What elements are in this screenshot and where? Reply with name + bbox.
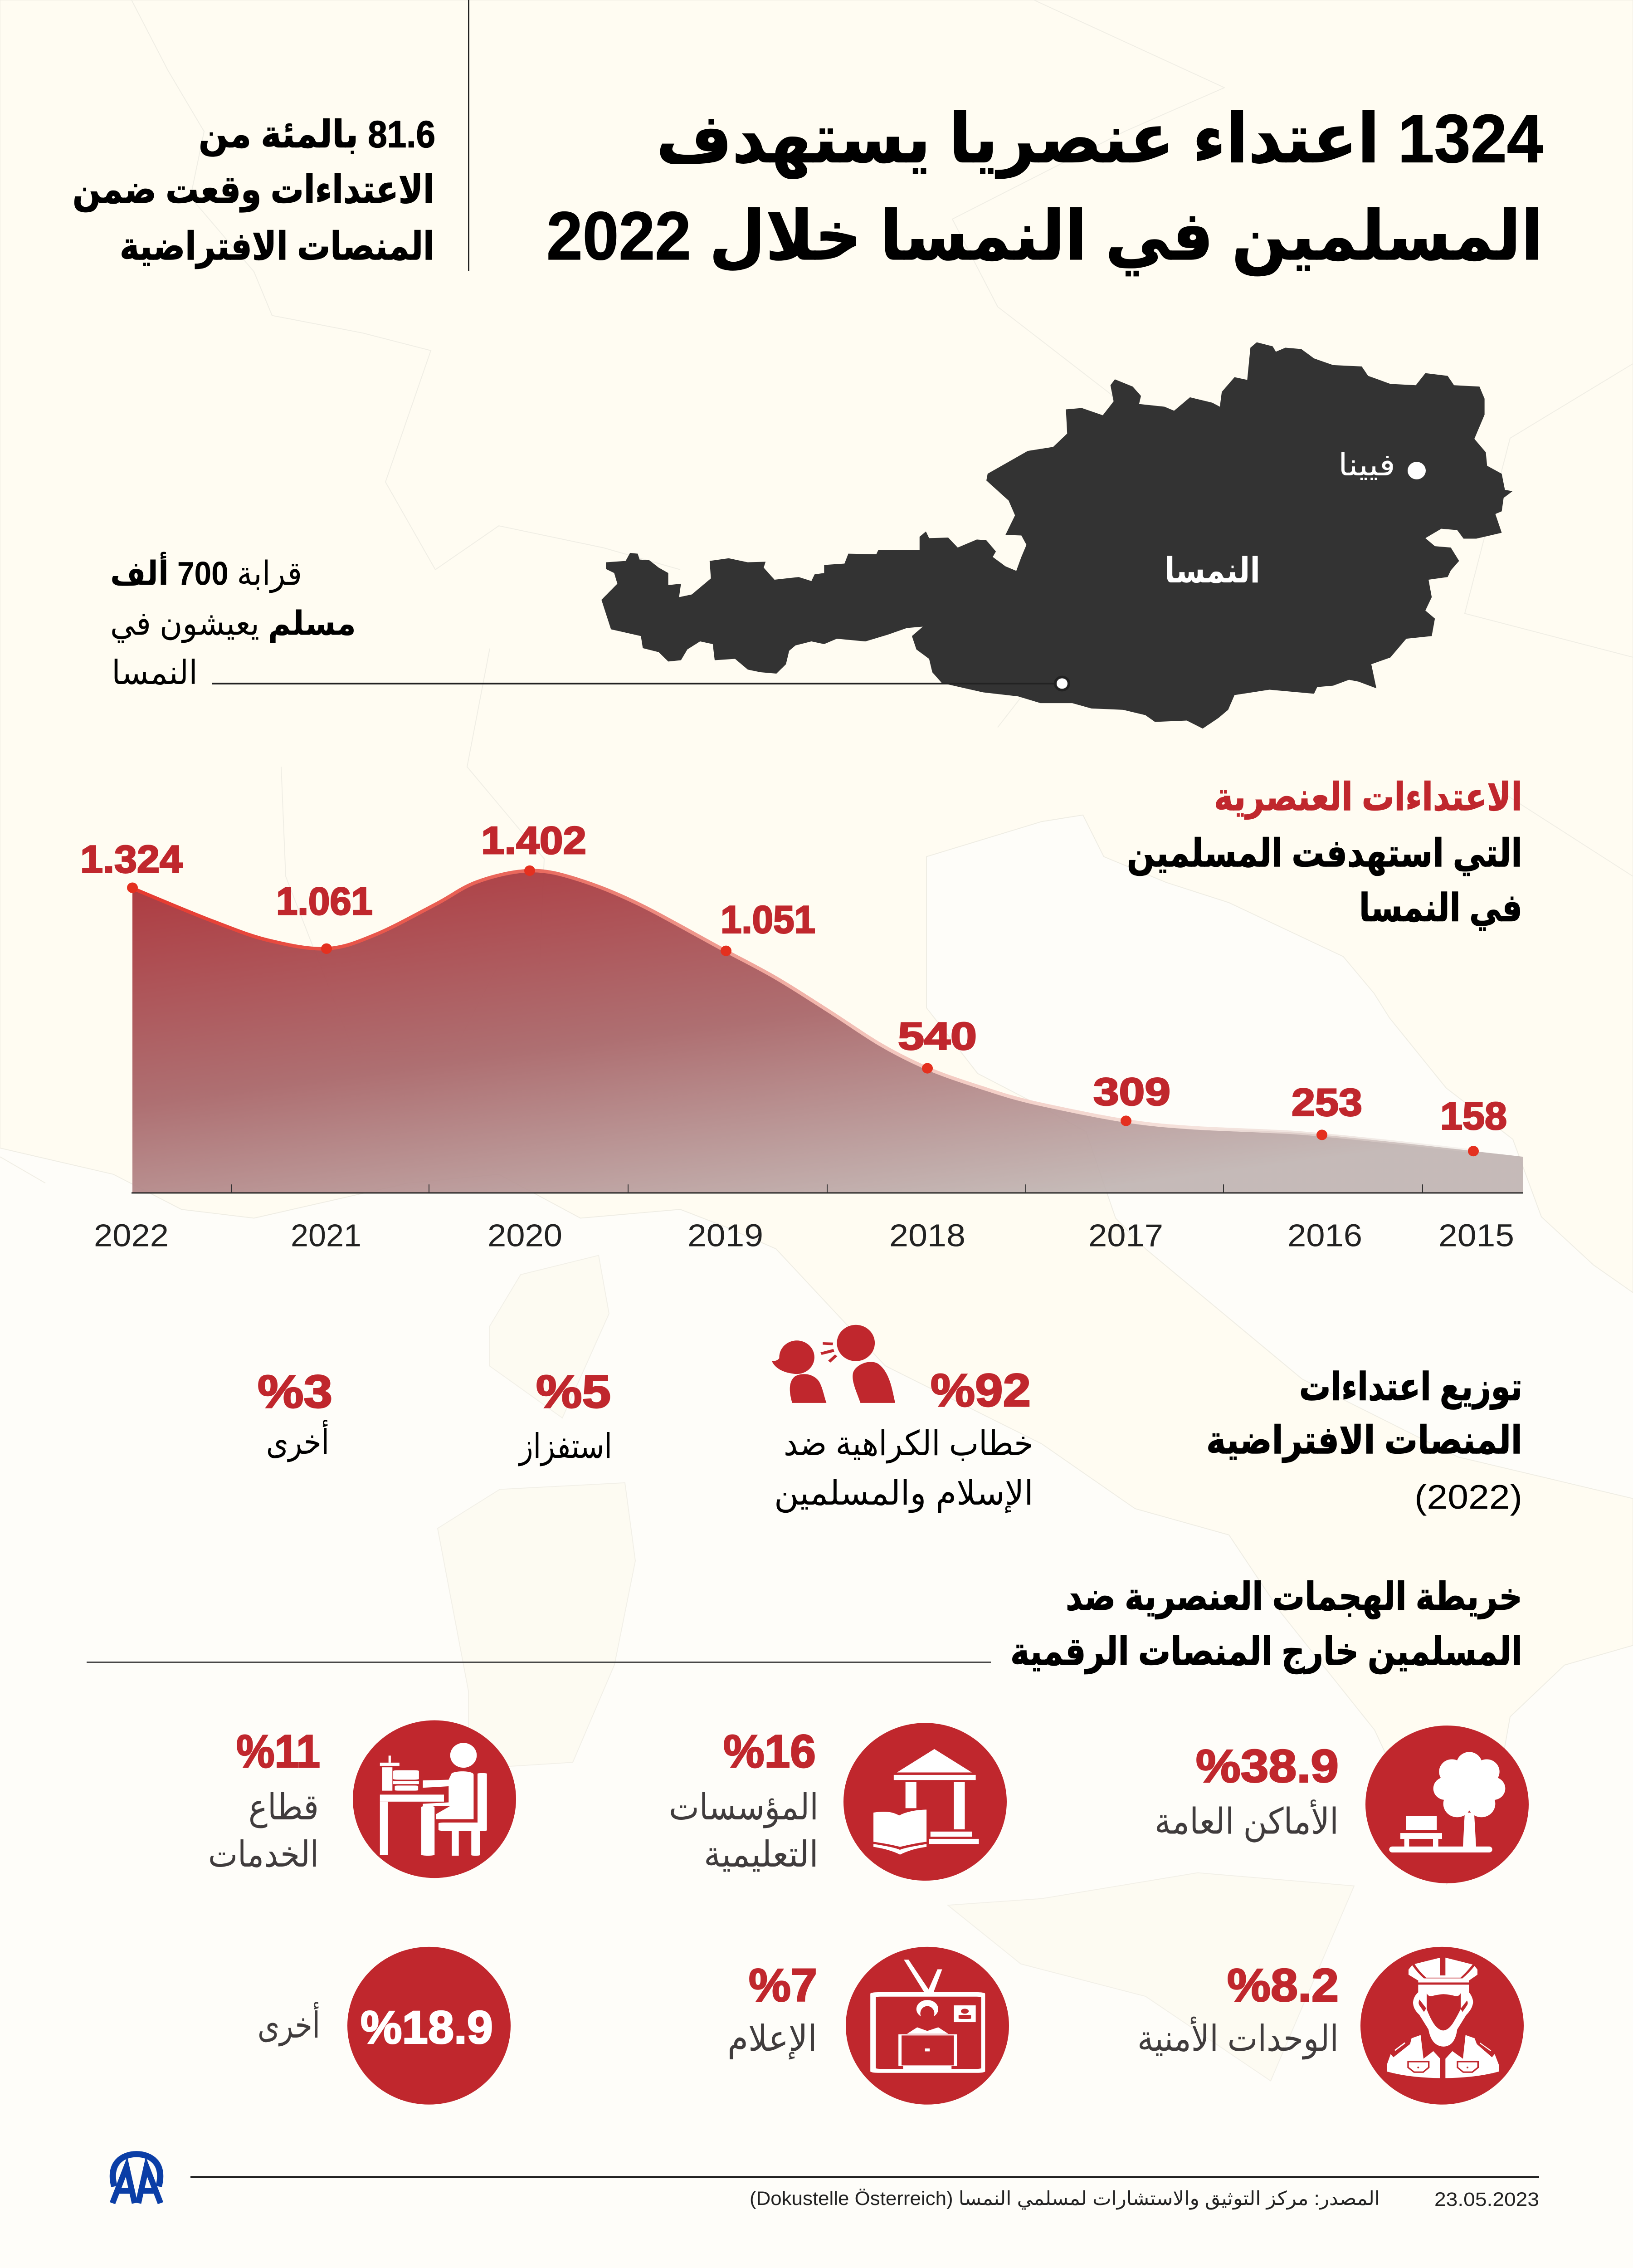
year axis labels: 2020 xyxy=(487,1217,562,1253)
stat: hate speech: الإسلام والمسلمين xyxy=(774,1474,1033,1513)
icon: person eating at table xyxy=(353,1721,516,1878)
stat: public places xyxy=(1155,1725,1529,1883)
title: 1324 اعتداء عنصريا يستهدف xyxy=(656,100,1543,179)
stat: educational institutions: %16 xyxy=(723,1725,816,1777)
callout: online share xyxy=(73,0,469,271)
icon: two people arguing xyxy=(772,1325,895,1403)
value labels: 1.324 xyxy=(80,838,182,881)
year axis labels xyxy=(94,1217,1514,1253)
map of Austria xyxy=(601,342,1512,728)
year axis labels: 2018 xyxy=(889,1217,965,1253)
year axis labels: 2019 xyxy=(687,1217,763,1253)
stat: public places: %38.9 xyxy=(1196,1740,1339,1792)
stat: provocation xyxy=(518,1366,612,1466)
footer: 23.05.2023 xyxy=(1434,2189,1539,2210)
area chart xyxy=(80,819,1523,1253)
heading: offline attacks xyxy=(87,1575,1522,1674)
callout: online share: المنصات الافتراضية xyxy=(120,225,434,269)
heading: racist attacks chart: التي استهدفت المسلمين xyxy=(1127,832,1522,875)
footer xyxy=(190,2176,1539,2210)
stat: other attacks: %18.9 xyxy=(361,2002,493,2053)
value labels: 540 xyxy=(898,1015,977,1058)
stat: other: أخرى xyxy=(266,1420,329,1462)
data points xyxy=(127,865,1479,1156)
callout: Muslim population: قرابة 700 ألف xyxy=(110,552,302,593)
callout: Muslim population: النمسا xyxy=(112,654,198,691)
heading: online platform distribution xyxy=(1206,1366,1522,1516)
stat: security units: الوحدات الأمنية xyxy=(1137,2016,1339,2060)
year axis labels: 2016 xyxy=(1287,1217,1362,1253)
label: Austria: النمسا xyxy=(1165,551,1260,590)
stat: security units: %8.2 xyxy=(1227,1960,1339,2011)
title xyxy=(546,100,1543,276)
stat: educational institutions: التعليمية xyxy=(704,1834,819,1875)
stat: services sector: الخدمات xyxy=(208,1834,319,1875)
label: Vienna: فيينا xyxy=(1338,448,1395,482)
value labels: 309 xyxy=(1093,1071,1170,1114)
stat: other xyxy=(258,1366,332,1462)
heading: racist attacks chart: الاعتداءات العنصرية xyxy=(1214,776,1522,820)
stat: other attacks xyxy=(258,1947,511,2105)
heading: racist attacks chart xyxy=(1127,776,1522,930)
heading: offline attacks: المسلمين خارج المنصات الرقمية xyxy=(1010,1630,1522,1674)
stat: educational institutions: المؤسسات xyxy=(669,1787,819,1828)
stat: educational institutions xyxy=(669,1723,1007,1881)
logo: Anadolu Agency xyxy=(112,2154,161,2203)
value labels: 1.402 xyxy=(481,819,586,862)
icon: television presenter xyxy=(846,1947,1009,2105)
value labels: 158 xyxy=(1440,1095,1507,1138)
icon: tree and bench xyxy=(1365,1725,1529,1883)
stat: provocation: %5 xyxy=(536,1366,611,1418)
year axis labels: 2017 xyxy=(1088,1217,1163,1253)
year axis labels: 2015 xyxy=(1438,1217,1514,1253)
title: المسلمين في النمسا خلال 2022 xyxy=(546,197,1543,276)
heading: online platform distribution: المنصات الافتراضية xyxy=(1206,1419,1522,1463)
stat: other attacks: أخرى xyxy=(258,2002,320,2047)
callout: online share: 81.6 بالمئة من xyxy=(199,113,435,156)
stat: hate speech xyxy=(772,1325,1033,1513)
stat: services sector: قطاع xyxy=(249,1787,319,1828)
callout: Muslim population xyxy=(110,552,1069,691)
heading: online platform distribution: (2022) xyxy=(1414,1478,1522,1516)
stat: provocation: استفزاز xyxy=(518,1427,612,1466)
stat: services sector: %11 xyxy=(236,1725,320,1777)
stat: hate speech: خطاب الكراهية ضد xyxy=(784,1425,1033,1464)
icon: police officer xyxy=(1360,1947,1524,2105)
stat: services sector xyxy=(208,1721,516,1878)
heading: racist attacks chart: في النمسا xyxy=(1359,887,1522,930)
stat: media: الإعلام xyxy=(727,2019,817,2060)
stat: media: %7 xyxy=(749,1960,817,2011)
value labels: 253 xyxy=(1292,1081,1362,1124)
year axis labels: 2022 xyxy=(94,1217,169,1253)
value labels: 1.051 xyxy=(721,899,815,941)
year axis labels: 2021 xyxy=(291,1217,361,1253)
callout: Muslim population: مسلم يعيشون في xyxy=(110,605,356,643)
heading: offline attacks: خريطة الهجمات العنصرية ضد xyxy=(1066,1575,1522,1619)
stat: other: %3 xyxy=(258,1366,332,1418)
footer: المصدر: مركز التوثيق والاستشارات لمسلمي النمسا (Dokustelle Österreich) xyxy=(750,2188,1380,2210)
stat: security units xyxy=(1137,1947,1524,2105)
stat: public places: الأماكن العامة xyxy=(1155,1799,1339,1843)
icon: building and book xyxy=(843,1723,1007,1881)
stat: media xyxy=(727,1947,1009,2105)
value labels xyxy=(80,819,1507,1138)
heading: online platform distribution: توزيع اعتداءات xyxy=(1299,1366,1522,1409)
stat: hate speech: %92 xyxy=(931,1365,1031,1416)
callout: online share: الاعتداءات وقعت ضمن xyxy=(73,169,434,212)
value labels: 1.061 xyxy=(276,880,373,923)
marker: Vienna xyxy=(1408,462,1426,479)
